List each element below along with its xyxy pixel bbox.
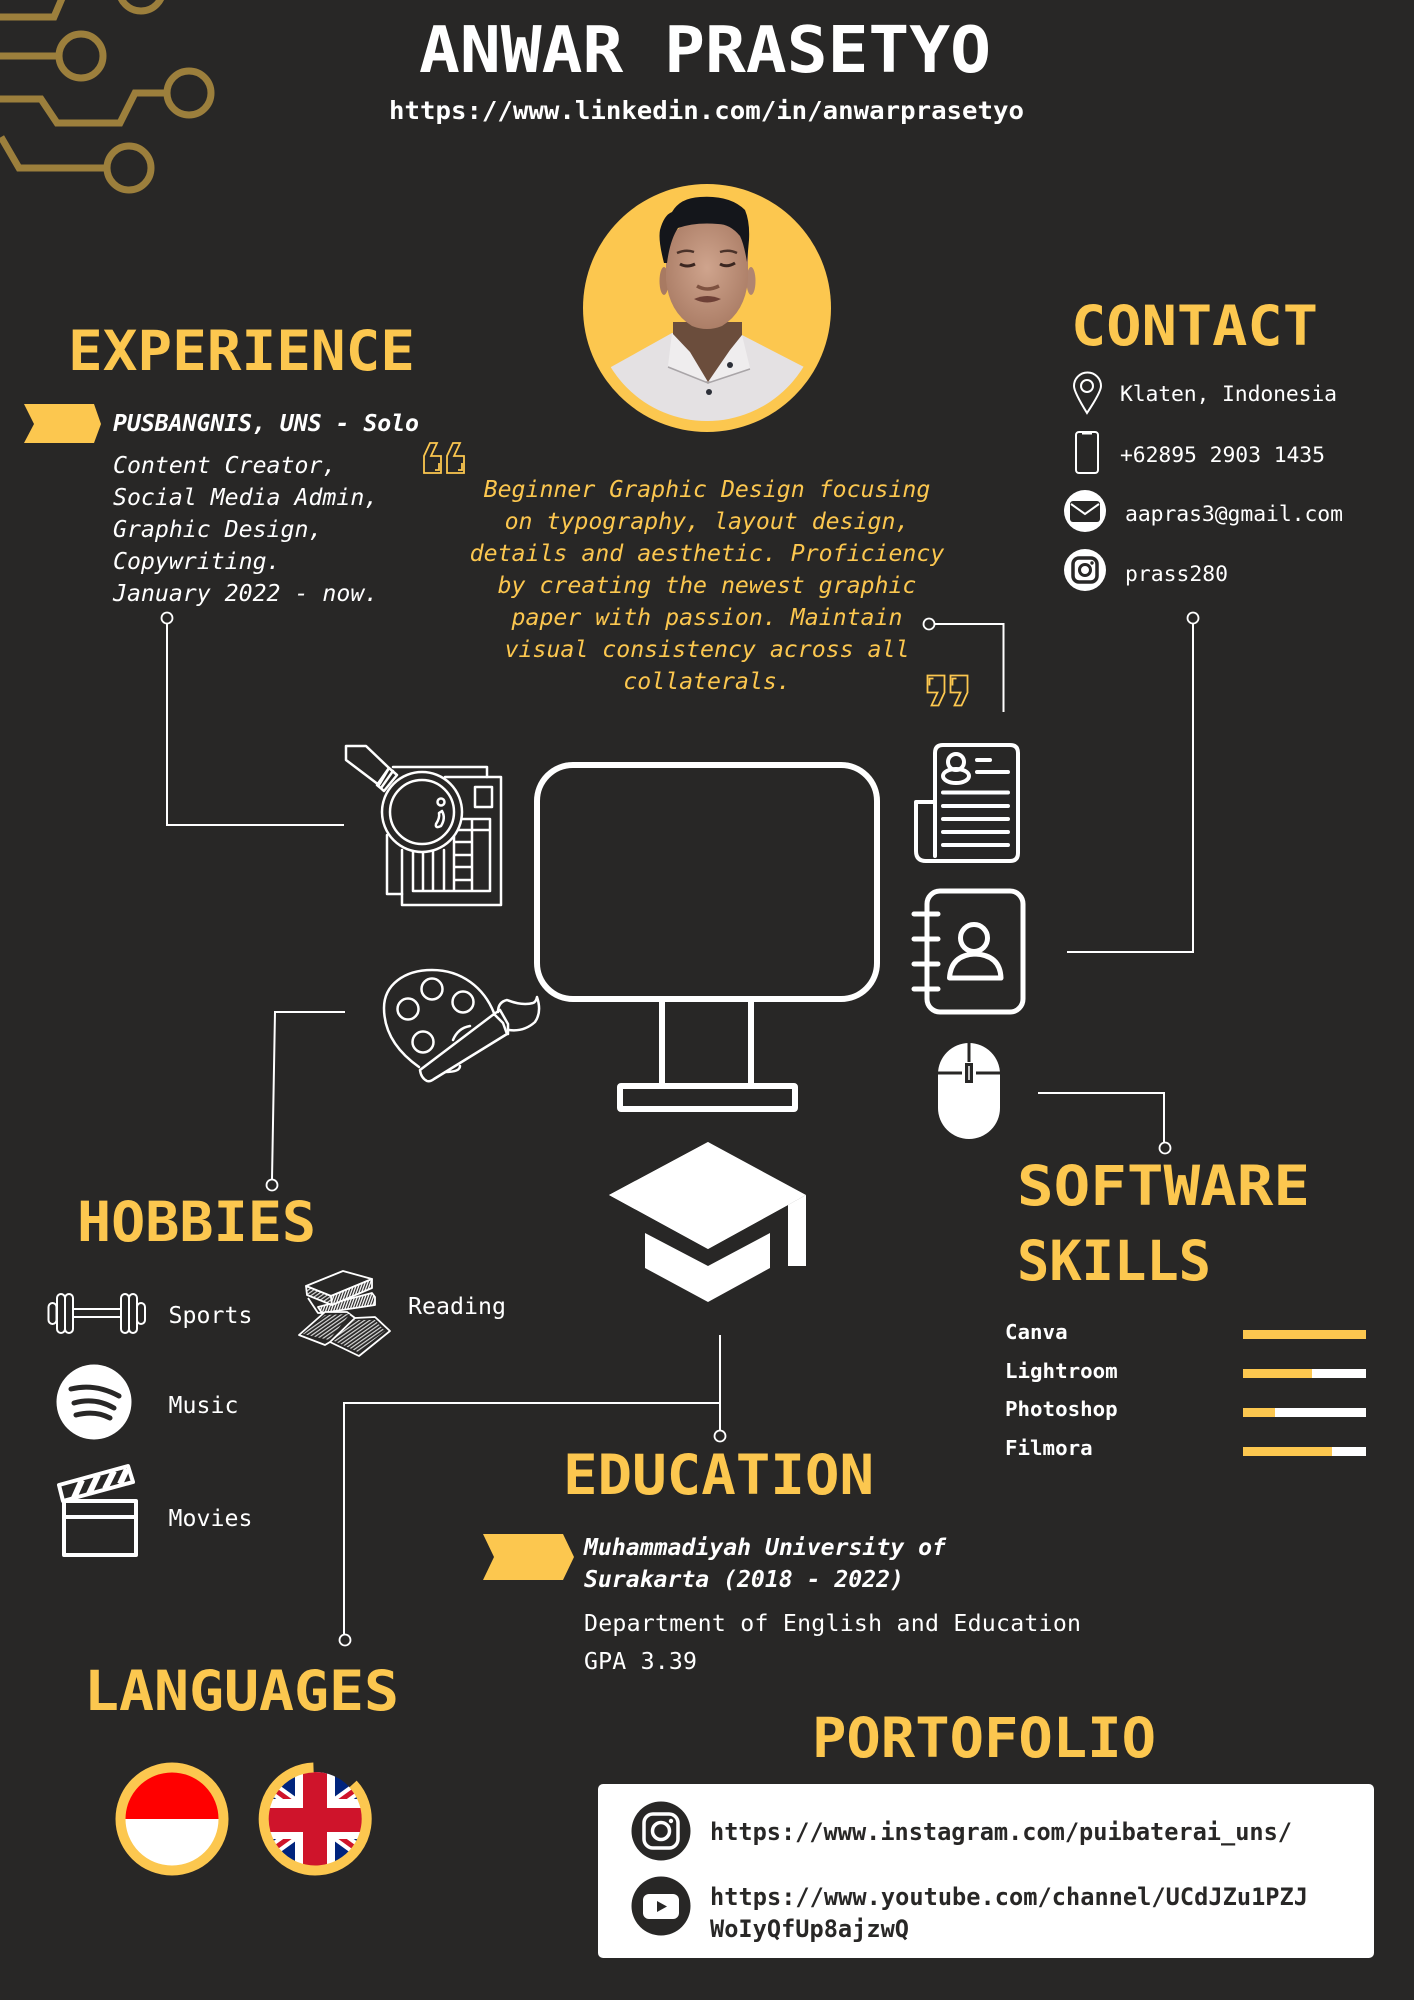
skill labels: [1005, 1320, 1118, 1460]
icon: dumbbell: [48, 1294, 145, 1333]
icon: spotify: [56, 1364, 132, 1440]
youtube link: [710, 1883, 1308, 1943]
panel: portfolio: [598, 1706, 1374, 1958]
heading: hobbies: HOBBIES: [77, 1190, 316, 1254]
ribbon marker: [24, 404, 101, 443]
icon: circuit decoration: [0, 0, 211, 190]
role list: Graphic Design,: [113, 516, 322, 543]
heading: contact: CONTACT: [1071, 294, 1318, 358]
panel: languages: [84, 1659, 399, 1877]
icon: graduation cap: [609, 1142, 806, 1302]
icon: magnifier over newspaper: [346, 746, 501, 905]
role list: Content Creator,: [113, 452, 336, 479]
skill bars: [1243, 1330, 1366, 1456]
profile photo: [583, 184, 831, 440]
connector: experience: [162, 612, 344, 825]
heading: languages: LANGUAGES: [84, 1659, 399, 1723]
icon: email: [1064, 490, 1106, 532]
label: reading: Reading: [408, 1293, 506, 1320]
heading: portfolio: PORTOFOLIO: [812, 1706, 1156, 1770]
youtube link: WoIyQfUp8ajzwQ: [710, 1915, 909, 1943]
summary text: on typography, layout design,: [505, 508, 909, 535]
icon: closing quote: [928, 676, 968, 706]
summary text: paper with passion. Maintain: [511, 604, 902, 631]
summary text: by creating the newest graphic: [498, 572, 916, 599]
heading: software skills: SKILLS: [1017, 1229, 1211, 1293]
linkedin url: https://www.linkedin.com/in/anwarprasetyo: [389, 96, 1024, 125]
heading: software skills: SOFTWARE: [1017, 1154, 1310, 1218]
icon: opening quote: [424, 443, 464, 473]
icon: monitor: [537, 765, 877, 1109]
phone number: +62895 2903 1435: [1120, 443, 1325, 468]
icon: instagram: [1064, 549, 1106, 591]
school name: [583, 1534, 947, 1593]
icon: phone: [1076, 432, 1098, 473]
department and gpa: Department of English and Education: [584, 1610, 1081, 1637]
address: Klaten, Indonesia: [1120, 382, 1337, 407]
role list: January 2022 - now.: [112, 580, 378, 607]
icon: location pin: [1074, 372, 1101, 413]
skill labels: Filmora: [1005, 1436, 1093, 1460]
icon: resume document: [916, 745, 1018, 861]
panel: contact: [1064, 294, 1343, 591]
icon: instagram: [632, 1802, 690, 1860]
school name: Muhammadiyah University of: [583, 1534, 947, 1561]
label: sports: Sports: [168, 1302, 252, 1329]
panel: software skills: [1005, 1154, 1366, 1460]
label: movies: Movies: [168, 1505, 252, 1532]
title: ANWAR PRASETYO: [419, 13, 991, 88]
icon: contact book: [914, 891, 1023, 1012]
summary text: [470, 476, 944, 695]
summary text: collaterals.: [623, 668, 791, 695]
panel: hobbies: [48, 1190, 506, 1555]
summary text: Beginner Graphic Design focusing: [484, 476, 930, 503]
panel: experience: [24, 319, 419, 607]
skill labels: Canva: [1005, 1320, 1068, 1344]
school name: Surakarta (2018 - 2022): [584, 1566, 904, 1593]
heading: experience: EXPERIENCE: [68, 319, 415, 383]
employer: PUSBANGNIS, UNS - Solo: [113, 410, 419, 437]
skill labels: Lightroom: [1005, 1359, 1118, 1383]
icon: movie clapper: [59, 1466, 136, 1555]
department and gpa: [584, 1610, 1081, 1675]
role list: Social Media Admin,: [113, 484, 378, 511]
portfolio card: [598, 1784, 1374, 1958]
connector: software: [1038, 1093, 1170, 1154]
ribbon marker: [483, 1534, 574, 1580]
icon: books: [299, 1271, 390, 1356]
heading: education: EDUCATION: [563, 1443, 874, 1507]
summary text: visual consistency across all: [505, 636, 909, 663]
youtube link: https://www.youtube.com/channel/UCdJZu1PZJ: [710, 1883, 1308, 1911]
department and gpa: GPA 3.39: [584, 1648, 697, 1675]
skill labels: Photoshop: [1005, 1397, 1118, 1421]
connector: summary: [924, 618, 1004, 712]
instagram link: https://www.instagram.com/puibaterai_uns/: [710, 1818, 1292, 1846]
icon: youtube: [632, 1876, 690, 1936]
connector: contact: [1067, 612, 1198, 952]
label: music: Music: [168, 1392, 238, 1419]
connector: education and languages: [340, 1335, 726, 1646]
heading: software skills: [1017, 1154, 1310, 1293]
instagram handle: prass280: [1125, 562, 1228, 587]
email address: aapras3@gmail.com: [1125, 502, 1343, 527]
icon: paint palette and brush: [384, 970, 539, 1081]
role list: [112, 452, 378, 607]
summary text: details and aesthetic. Proficiency: [470, 540, 944, 567]
icon: indonesia flag: [120, 1765, 224, 1873]
panel: education: [483, 1443, 1081, 1675]
connector: hobbies: [266, 1012, 345, 1190]
icon: mouse: [938, 1043, 1000, 1139]
icon: united kingdom flag: [258, 1762, 372, 1876]
role list: Copywriting.: [113, 548, 281, 575]
